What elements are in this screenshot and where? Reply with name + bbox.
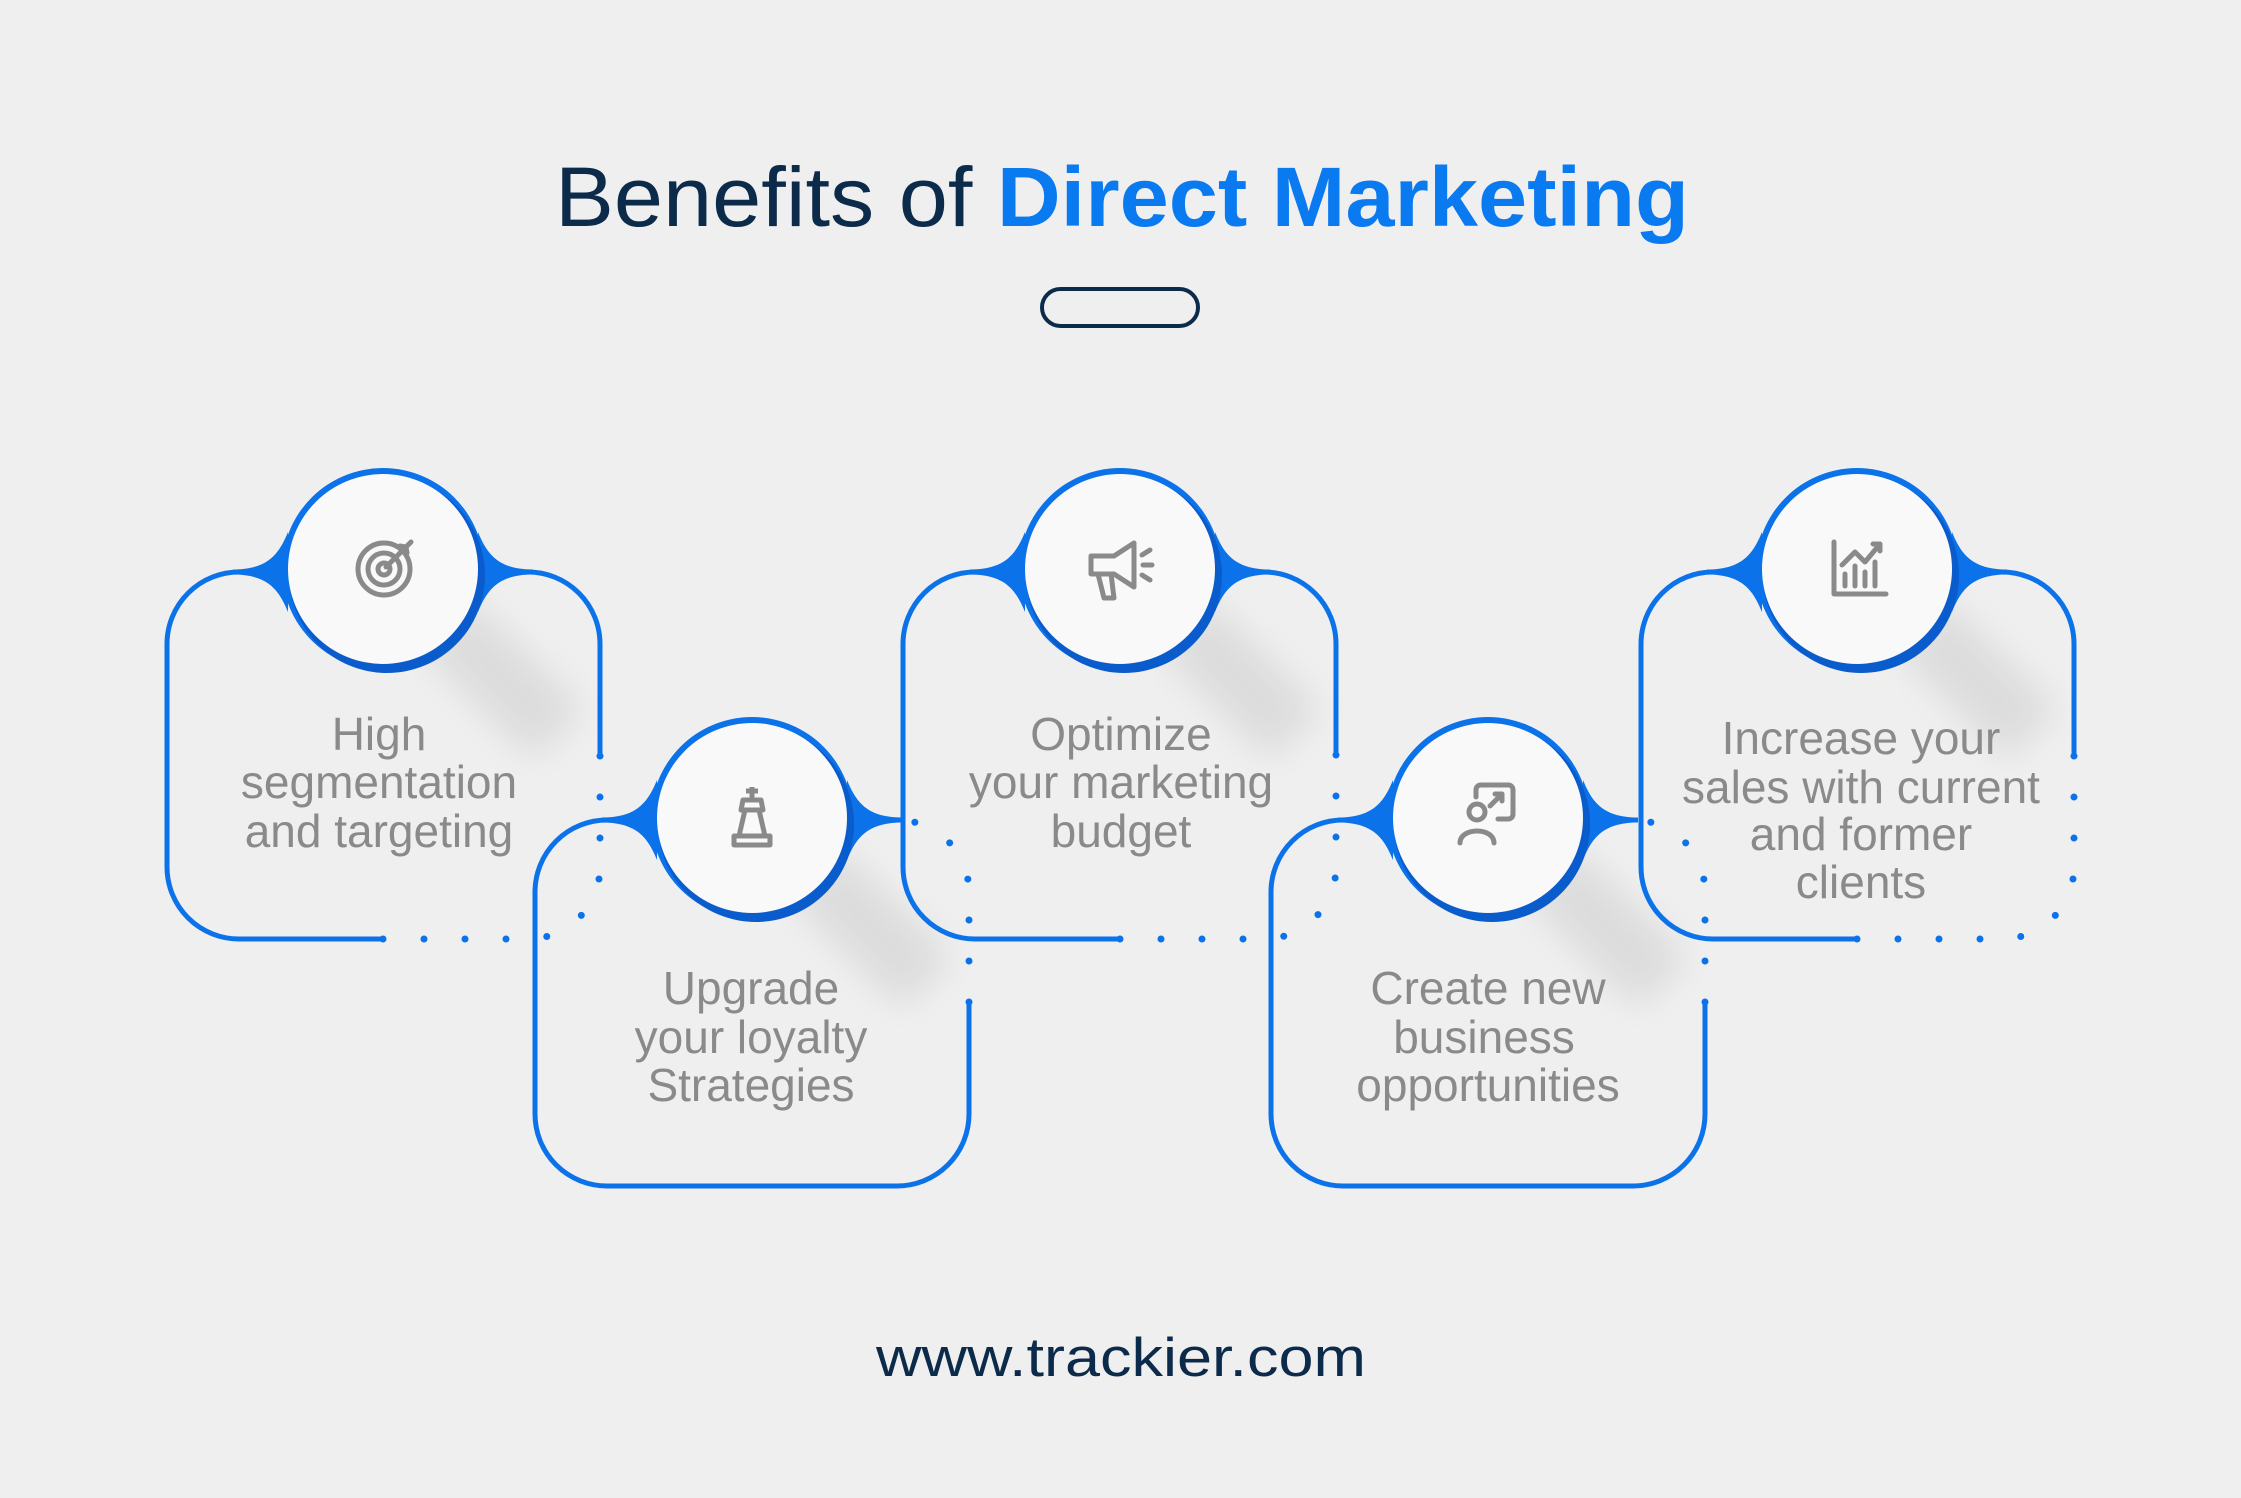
text: card 1: and targeting: [245, 805, 513, 857]
text: card 3: your marketing: [969, 756, 1273, 808]
icon: target: [358, 542, 411, 595]
text: card 4: opportunities: [1356, 1059, 1620, 1111]
text: card 3: budget: [1051, 805, 1192, 857]
panel: card 3: [903, 468, 1336, 939]
text: card 4: business: [1393, 1011, 1575, 1063]
text: card 1: High: [332, 708, 426, 760]
pill decoration: [1042, 289, 1198, 326]
text: card 2: Strategies: [647, 1059, 855, 1111]
panel: card 4: [1271, 717, 1705, 1186]
text: card 1: segmentation: [241, 756, 517, 808]
title: Benefits of Direct Marketing: [555, 150, 1689, 244]
text: card 2: Upgrade: [663, 962, 839, 1014]
panel: card 2: [535, 717, 969, 1186]
icon: megaphone: [1091, 543, 1152, 598]
panel: card 5: [1641, 468, 2074, 939]
text: card 2: your loyalty: [635, 1011, 867, 1063]
text: card 4: Create new: [1370, 962, 1606, 1014]
panel: card 1: [167, 468, 600, 939]
text: card 5: Increase your: [1722, 712, 2000, 764]
text: card 5: and former: [1750, 808, 1972, 860]
icon: chess piece: [734, 787, 770, 845]
icon: bar chart: [1834, 542, 1886, 594]
text: card 5: clients: [1796, 856, 1926, 908]
text: card 5: sales with current: [1682, 761, 2040, 813]
text: card 3: Optimize: [1030, 708, 1212, 760]
icon: person with growth arrow: [1460, 785, 1513, 843]
footer url: www.trackier.com: [875, 1326, 1366, 1388]
